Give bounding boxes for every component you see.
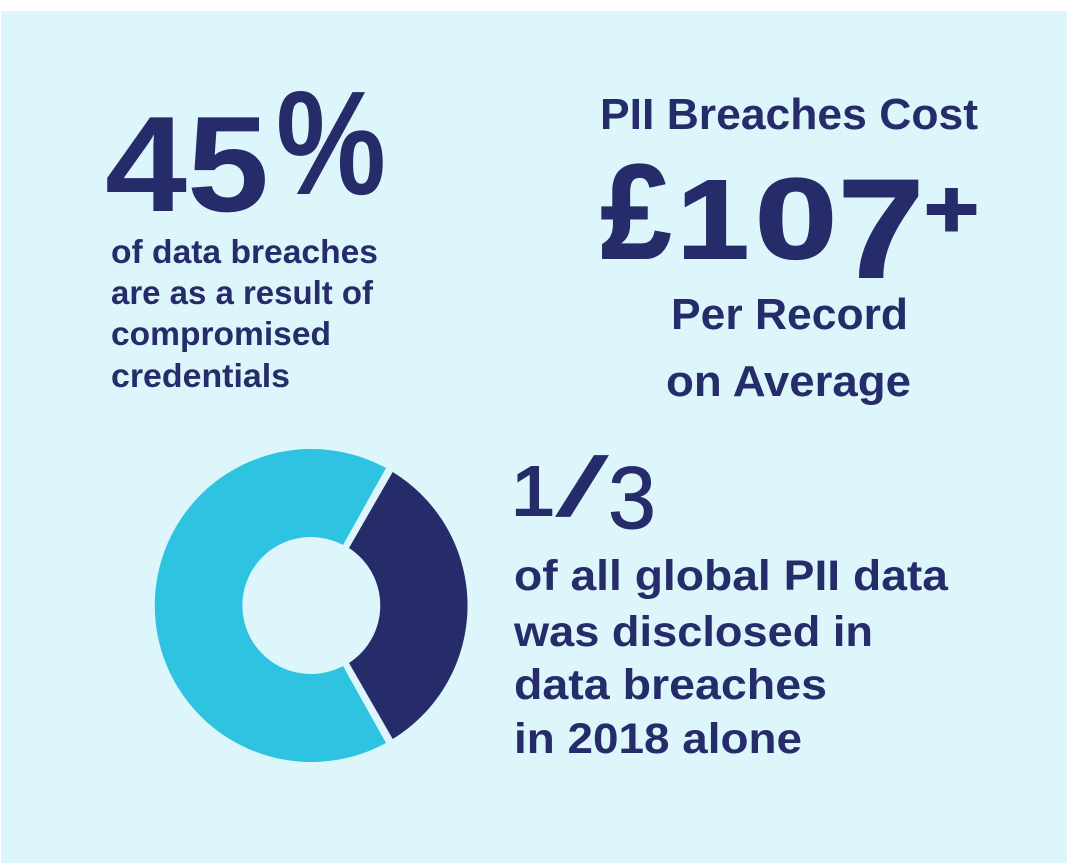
caption: compromised credentials: are as a result of [111, 274, 374, 311]
caption: global PII data: data breaches [514, 661, 827, 709]
caption: per record on average [666, 290, 911, 406]
fraction 1/3 [511, 440, 656, 547]
donut segment: one third [349, 472, 468, 739]
caption: global PII data [513, 552, 949, 763]
big number: 107 pounds plus: 7 [838, 150, 924, 307]
statistic: 45 percent [105, 61, 386, 394]
caption: global PII data: was disclosed in [513, 608, 873, 656]
big number: 107 pounds plus [601, 138, 979, 307]
statistic: cost per record [600, 90, 979, 406]
fraction 1/3: / [555, 440, 611, 534]
donut chart [155, 449, 468, 762]
big number: 107 pounds plus: 0 [755, 156, 837, 283]
big number: 107 pounds plus: + [924, 164, 979, 255]
caption: compromised credentials: of data breaches [111, 233, 378, 270]
caption: per record on average: on Average [666, 357, 911, 406]
big number: 107 pounds plus: £ [601, 138, 671, 287]
heading: PII Breaches Cost: PII Breaches Cost [600, 90, 978, 139]
fraction 1/3: 3 [608, 448, 656, 547]
donut segment: remaining share [155, 449, 386, 762]
caption: compromised credentials [111, 233, 378, 394]
caption: compromised credentials: compromised [111, 315, 331, 352]
caption: per record on average: Per Record [671, 290, 908, 339]
fraction 1/3: 1 [511, 452, 555, 530]
statistic: one third [511, 440, 949, 763]
caption: global PII data: in 2018 alone [514, 715, 802, 763]
caption: compromised credentials: credentials [111, 357, 290, 394]
big number: 107 pounds plus: 1 [677, 157, 749, 282]
big number 45: 45 [105, 88, 269, 240]
percent sign: % [276, 61, 386, 226]
caption: global PII data: of all global PII data [514, 552, 949, 600]
